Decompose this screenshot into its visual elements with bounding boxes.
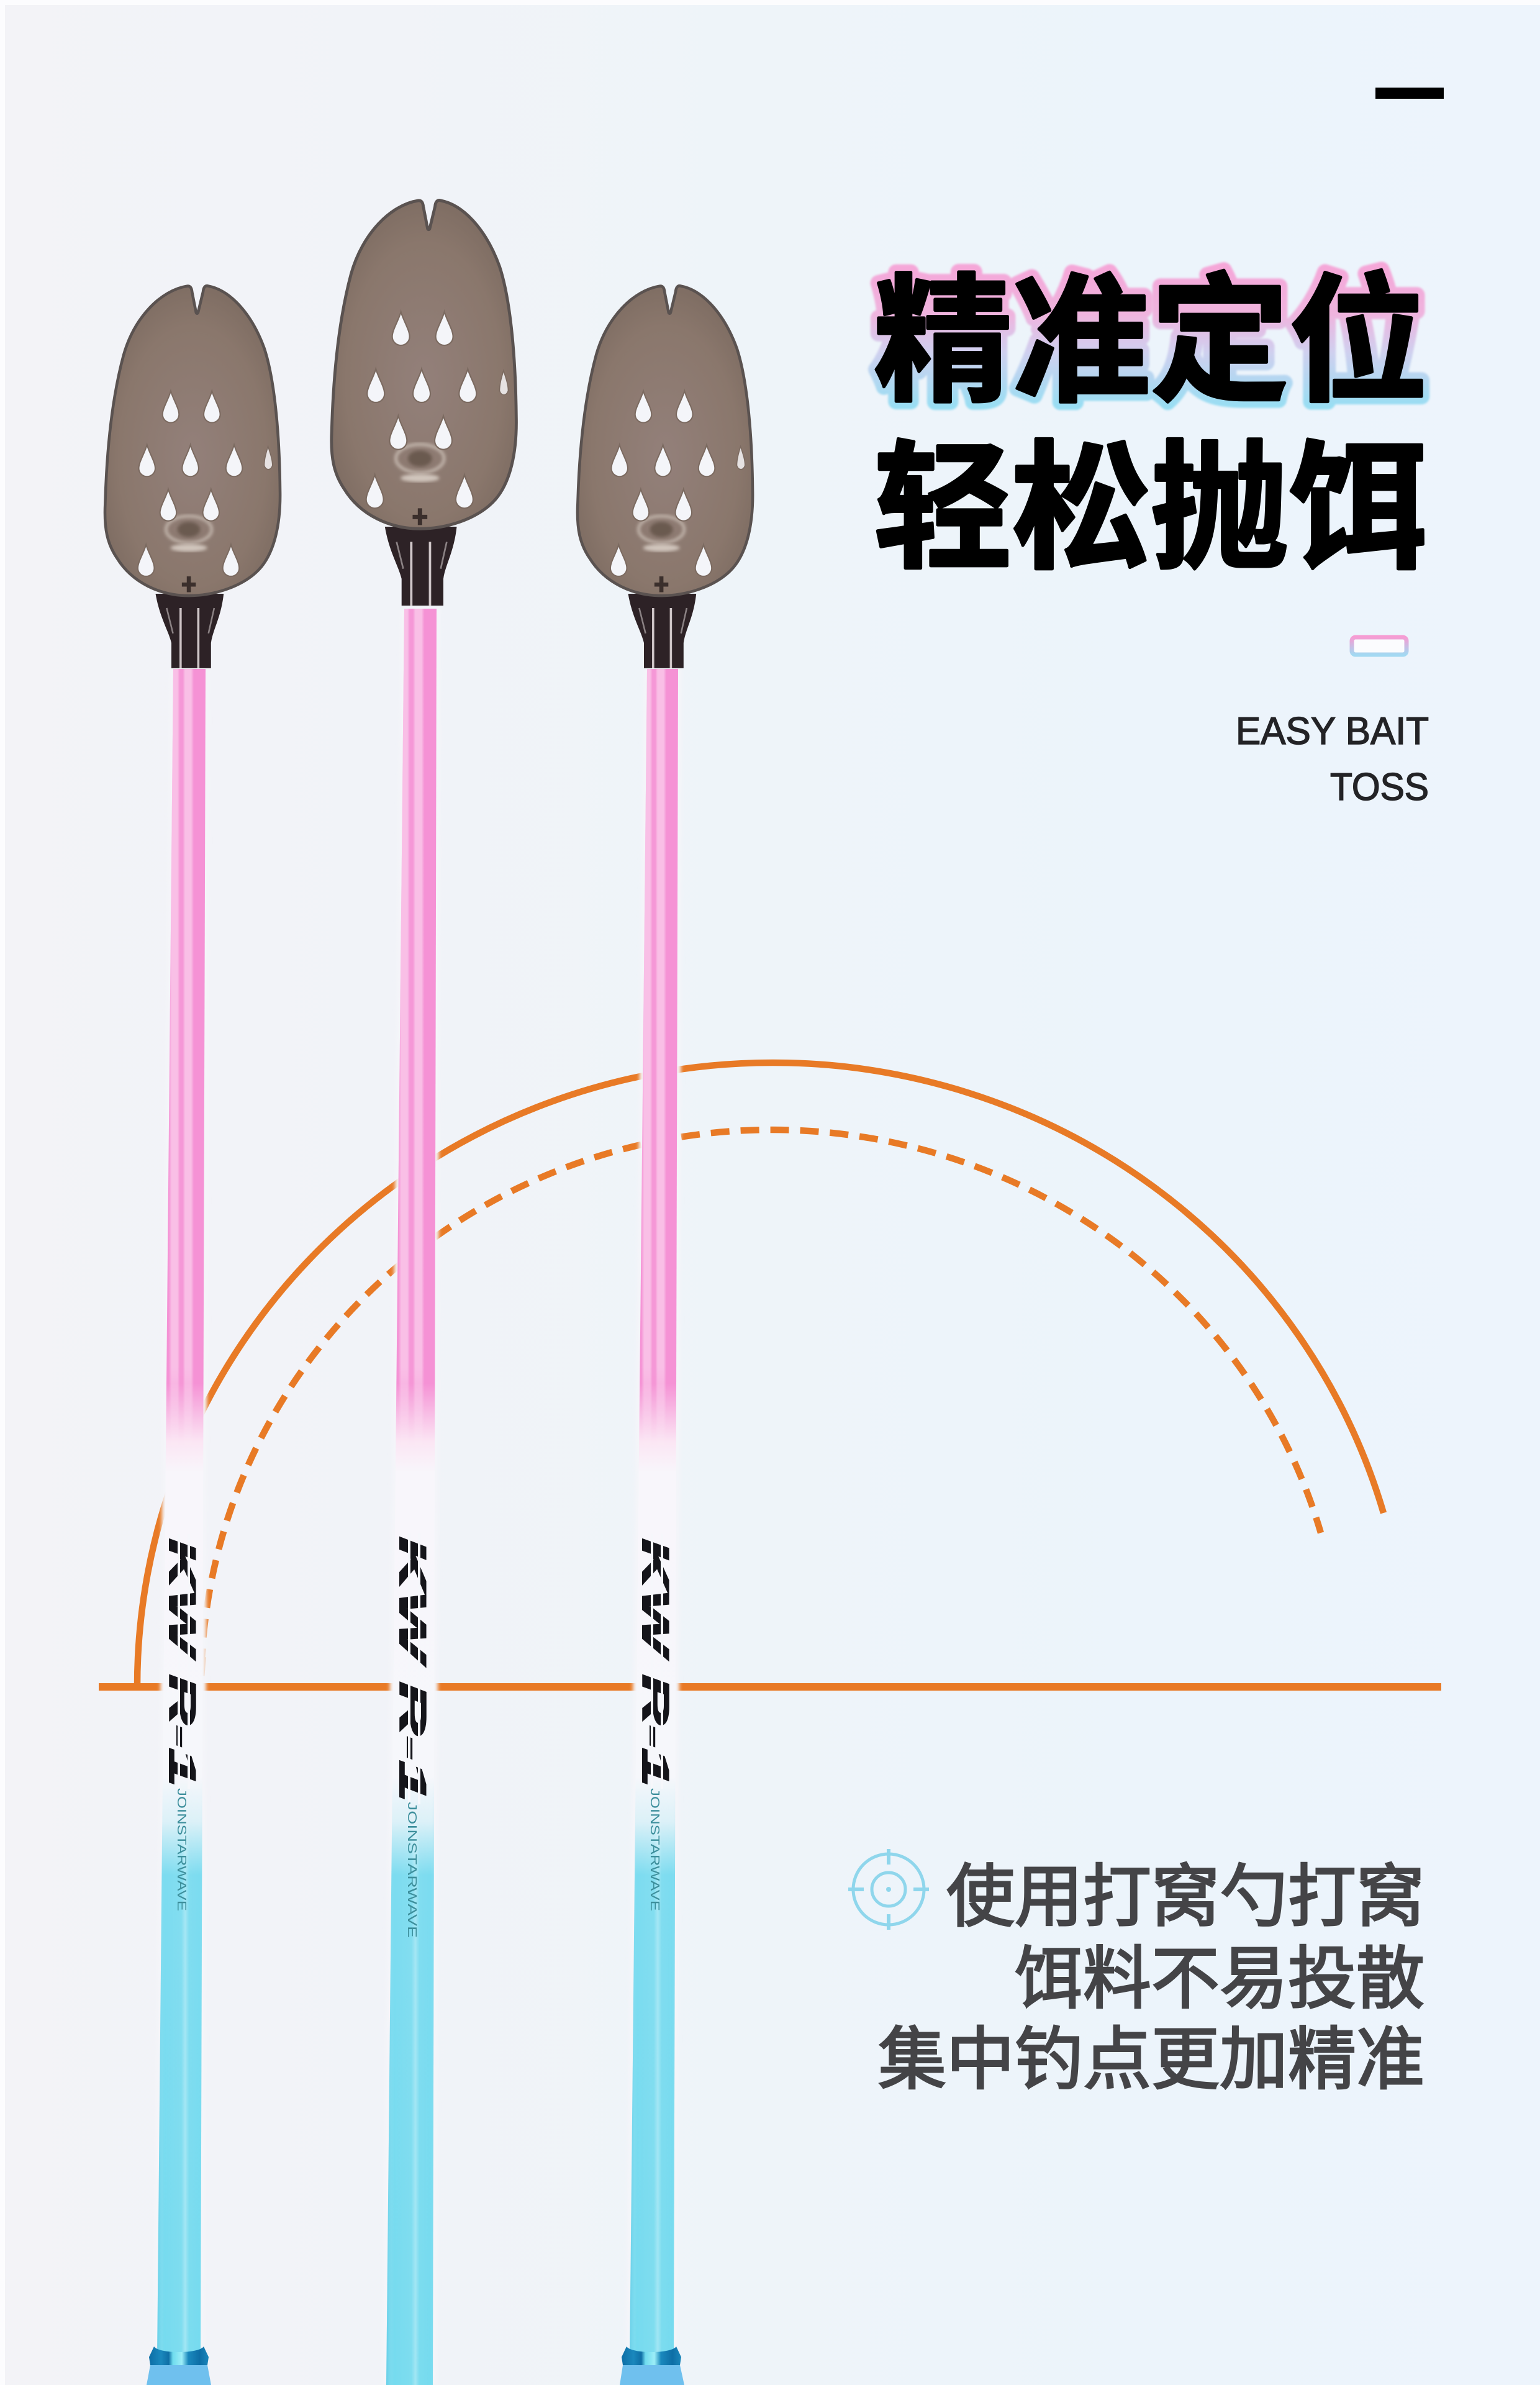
rod: left [157, 669, 206, 2360]
rod logo: left: KW R-1 [161, 1538, 203, 1787]
rod: right [630, 669, 678, 2360]
chart: throw trajectory arcs [99, 1063, 1441, 1687]
rod small text: centre: JOINSTARWAVE [405, 1802, 419, 1938]
handle cap: left [147, 2346, 211, 2385]
dashed trajectory arc [201, 1130, 1321, 1677]
spoon: centre [332, 200, 516, 606]
rod logo: right: KW R-1 [635, 1538, 676, 1787]
rod: centre [386, 609, 437, 2385]
baseline [99, 1683, 1441, 1691]
rod logo: centre: KW R-1 [392, 1537, 433, 1802]
spoon: right [578, 286, 753, 668]
english subtitle [1236, 710, 1429, 809]
rod halos [154, 609, 682, 2385]
handle cap: right [620, 2346, 684, 2385]
title line 2: 轻松抛饵 [874, 432, 1428, 586]
body text [878, 1859, 1424, 2098]
icon: pink and blue pill [1352, 637, 1406, 655]
title line 1: black fill: 精准定位 [874, 265, 1428, 419]
rod small text: right: JOINSTARWAVE [648, 1788, 661, 1911]
body line 2: 饵料不易投散 [1015, 1941, 1424, 2017]
title [874, 265, 1428, 586]
title line 1: gradient outline: 精准定位 [874, 265, 1428, 419]
spoon: left [105, 286, 280, 668]
body line 3: 集中钓点更加精准 [878, 2022, 1424, 2098]
subtitle line 1: EASY BAIT [1236, 710, 1429, 753]
icon: top black bar [1375, 88, 1444, 99]
icon: target crosshair [848, 1849, 929, 1930]
rod small text: left: JOINSTARWAVE [174, 1788, 188, 1911]
solid trajectory arc [137, 1063, 1384, 1686]
body line 1: 使用打窝勺打窝 [946, 1859, 1424, 1935]
subtitle line 2: TOSS [1330, 766, 1429, 809]
